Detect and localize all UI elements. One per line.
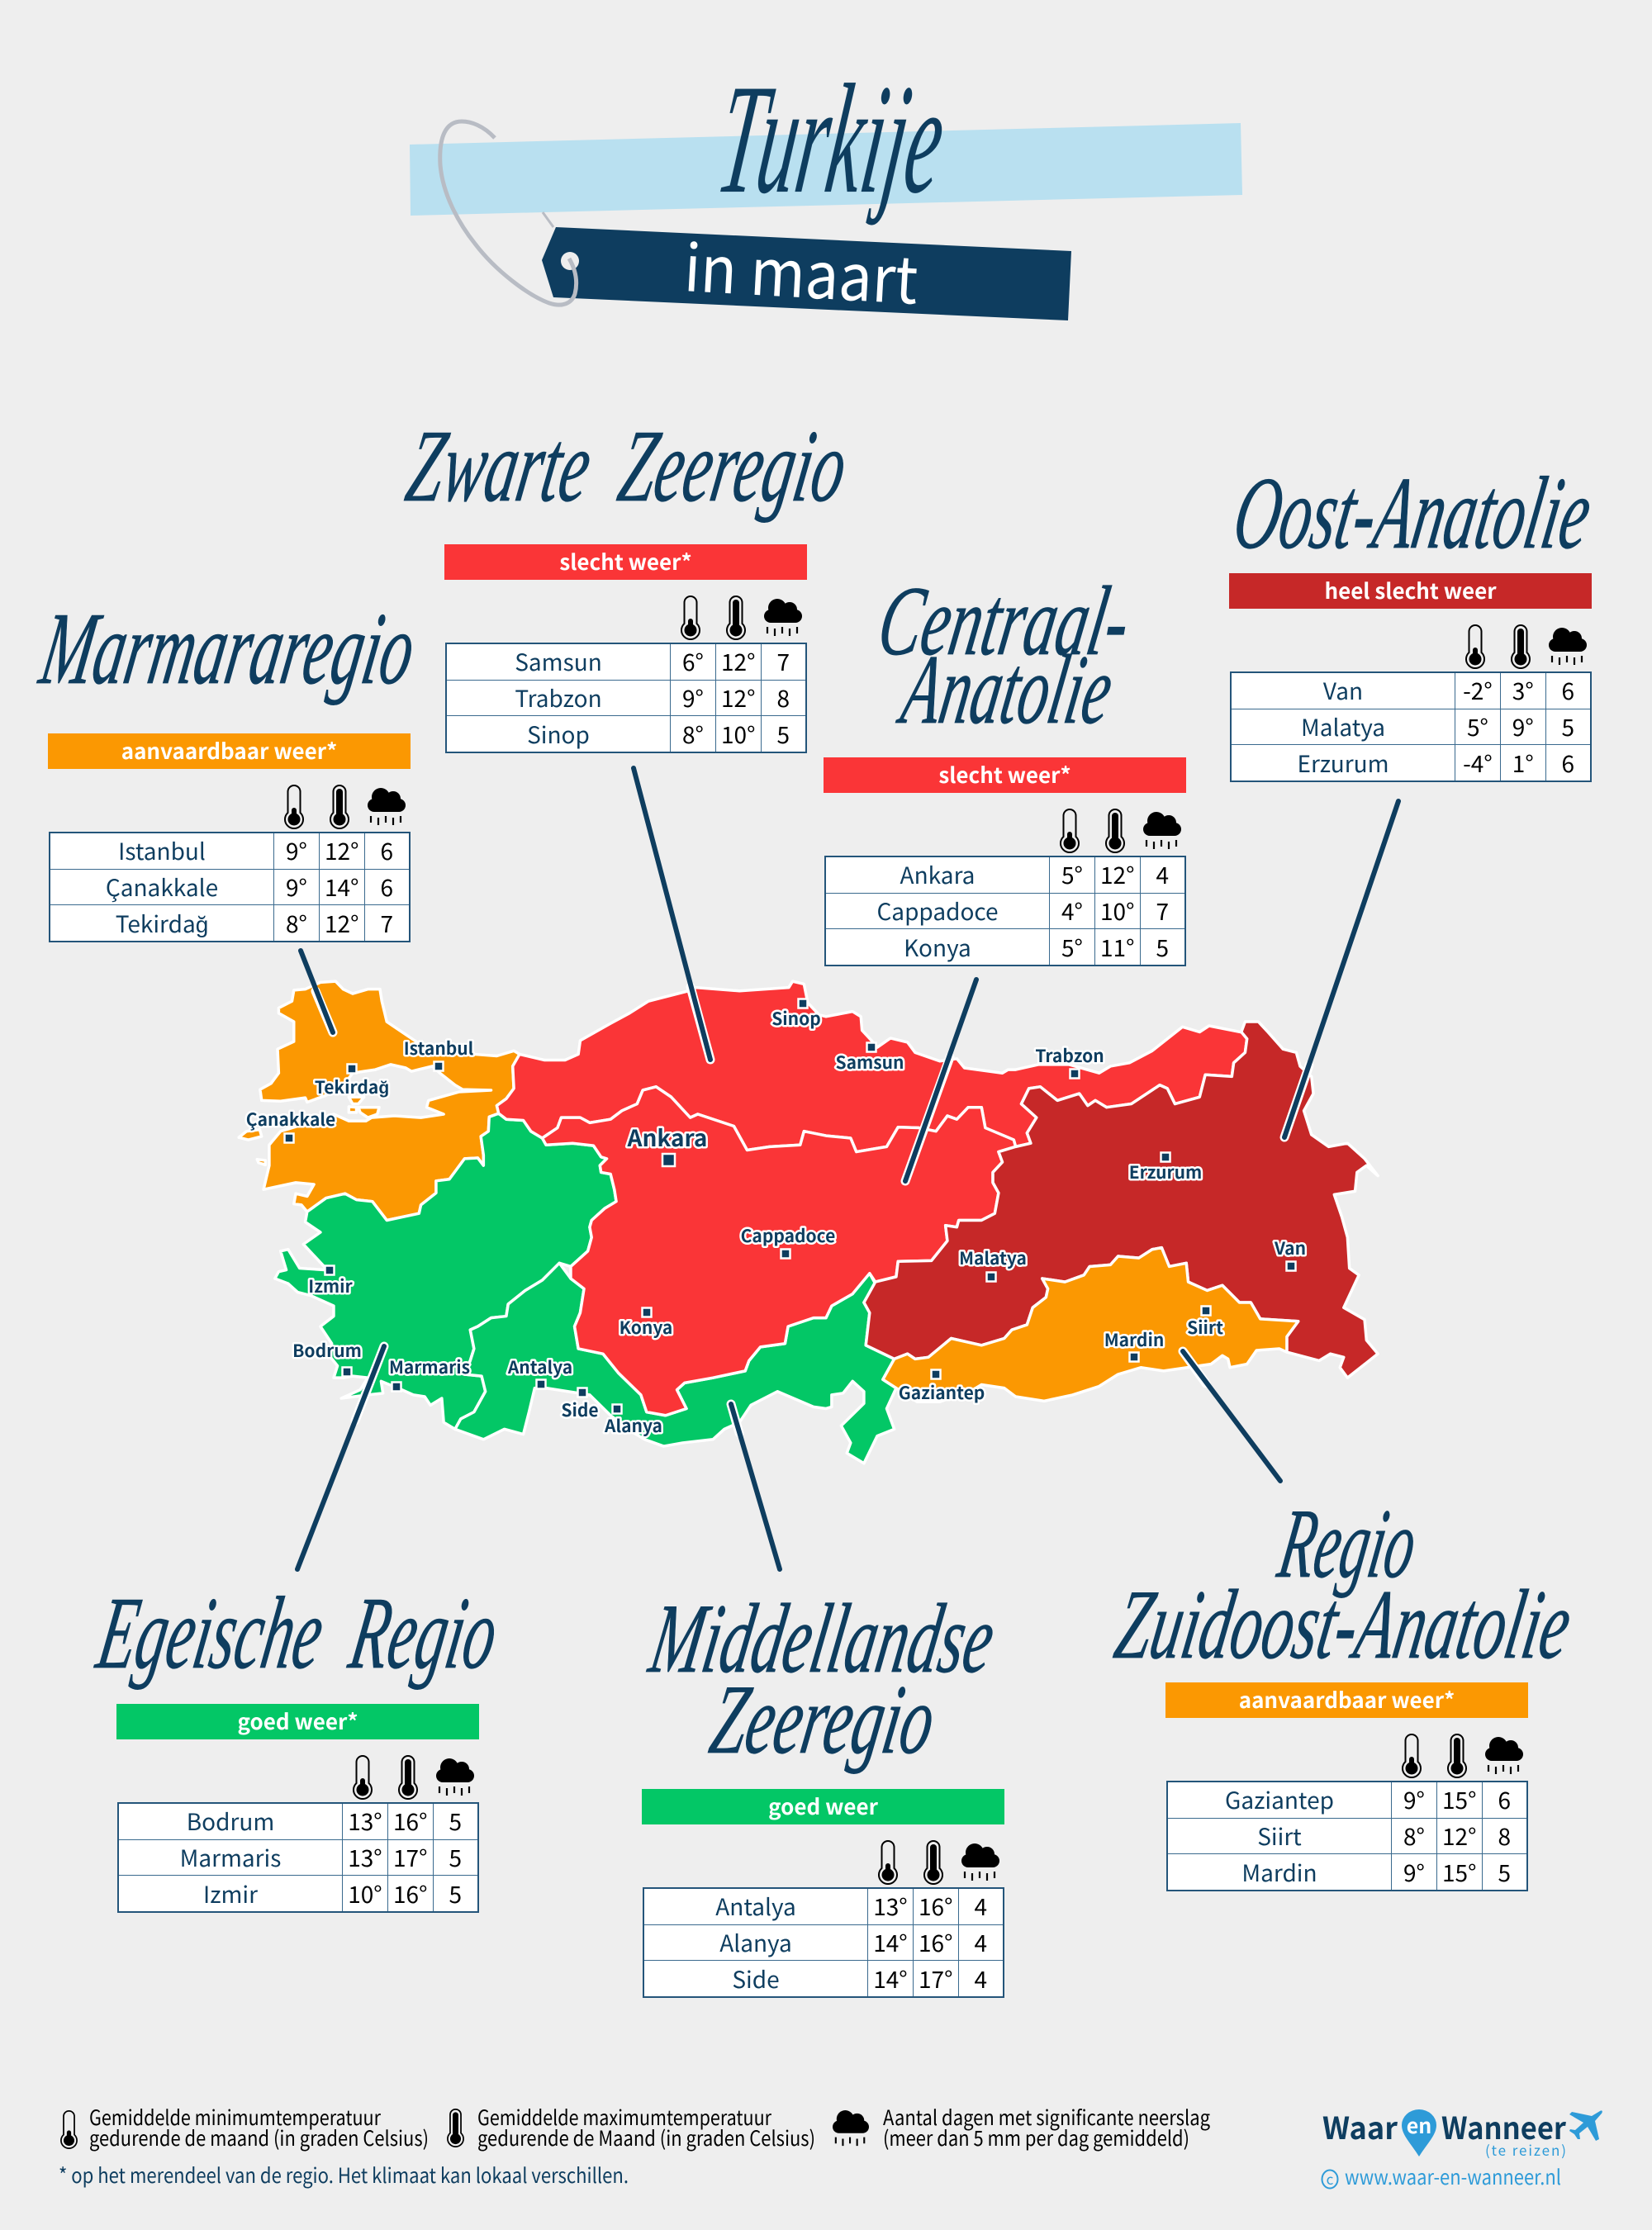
climate table: 15° [1442,1856,1476,1889]
leader line: Middellandse Zeeregio [731,1404,780,1569]
climate table: 7 [777,645,790,678]
panel: Regio Zuidoost-Anatolie [1165,1682,1528,1891]
heading: Middellandse Zeeregio: Middellandse [642,1584,1003,1694]
icon: max temp [1447,1734,1467,1778]
climate table: 14° [873,1926,908,1959]
climate table: Gaziantep [1225,1783,1334,1816]
climate table: 7 [381,907,393,940]
climate table: 6 [1562,674,1574,707]
climate table: 5° [1467,710,1488,743]
city labels: Samsun [836,1050,904,1075]
climate table: 10° [1100,894,1134,928]
icon: max temp [726,595,746,640]
heading: Marmararegio: Marmararegio [32,592,423,706]
climate table: 8 [1498,1820,1511,1853]
light blue band [410,123,1242,216]
climate table: 8° [1403,1820,1425,1853]
climate table: 12° [1442,1820,1476,1853]
climate table: 6° [682,645,704,678]
icon: rain [368,788,406,825]
climate table: 5 [449,1877,462,1910]
icon: maximum temperature [448,2109,463,2147]
map of Turkey [239,768,1398,1569]
city labels: Mardin [1104,1327,1164,1352]
tag string loop [440,121,577,305]
climate table: 9° [682,681,704,714]
rating banner [642,1789,1004,1824]
climate table: 17° [919,1962,952,1995]
climate table: 13° [348,1805,382,1838]
city labels: Istanbul [404,1036,474,1060]
climate table: 13° [348,1841,382,1874]
climate table: Konya [904,931,971,964]
rating banner: slecht weer* [559,546,692,576]
climate table: 5 [449,1841,462,1874]
climate table: 4 [975,1962,987,1995]
climate table: Bodrum [187,1805,274,1838]
icon: minimum temperature [61,2111,77,2148]
heading: Centraal-Anatolie [871,567,1138,745]
icon: rain [1143,812,1181,849]
city labels: Izmir [308,1274,354,1298]
climate table: 5° [1061,931,1083,964]
climate table: Siirt [1257,1820,1302,1853]
city labels: Ankara [627,1121,707,1154]
climate table: Sinop [527,718,590,751]
legend text: rain days: (meer dan 5 mm per dag gemiddeld) [883,2123,1189,2152]
icon: rain [764,599,802,636]
icon: min temp [353,1755,373,1800]
climate table: Ankara [900,858,975,891]
city labels [246,1006,1306,1438]
climate table: 9° [286,834,307,867]
region: Zwarte Zeeregio [496,981,1249,1152]
city labels: Alanya [604,1413,662,1438]
rating banner [116,1704,479,1739]
climate table: 16° [393,1877,427,1910]
climate table: 14° [873,1962,908,1995]
legend [61,2102,1210,2152]
climate table: 12° [325,907,358,940]
legend text: rain days: Aantal dagen met significante neerslag [883,2102,1210,2132]
logo: Waar en Wanneer: www.waar-en-wanneer.nl [1345,2161,1561,2191]
icon: rain [1485,1737,1523,1774]
footnote: * op het merendeel van de regio. Het klimaat kan lokaal verschillen. [59,2160,629,2190]
icon: max temp [330,785,349,829]
icon: max temp [398,1755,418,1800]
climate table: 12° [325,834,358,867]
climate table: 15° [1442,1783,1476,1816]
icon: rain [1549,628,1587,665]
icon: max temp [1105,809,1125,853]
city labels: Çanakkale [246,1107,335,1132]
logo: Waar en Wanneer: Wanneer [1441,2104,1567,2148]
climate table: 5 [1156,931,1169,964]
climate table: 4 [975,1926,987,1959]
climate table [117,1802,479,1913]
city labels: Antalya [507,1355,572,1379]
title: Turkije: Turkije [709,53,955,226]
region: Egeische Regio [275,1113,616,1429]
city labels: Sinop [771,1006,821,1031]
climate table: Marmaris [180,1841,281,1874]
climate table: 6 [1498,1783,1511,1816]
legend text: minimum temperature: gedurende de maand (in graden Celsius) [89,2123,429,2152]
leader line: Marmararegio [301,951,333,1032]
city labels: Tekirdağ [315,1075,389,1099]
climate table: 4° [1061,894,1083,928]
climate table: 9° [286,871,307,904]
tag hole [561,252,579,270]
climate table: 5 [1498,1856,1511,1889]
legend text: minimum temperature: Gemiddelde minimumtemperatuur [89,2102,381,2132]
panel: Oost-Anatolie [1229,573,1592,782]
icon: min temp [1465,624,1485,669]
legend text: rain days [883,2102,1210,2152]
climate table: Side [732,1962,780,1995]
climate table: Samsun [515,645,602,678]
legend text: minimum temperature [89,2102,429,2152]
climate table: 5 [449,1805,462,1838]
climate table: 12° [1100,858,1134,891]
climate table [49,832,411,942]
heading: Zwarte Zeeregio: Zwarte Zeeregio [399,410,855,524]
city labels: Konya [620,1315,672,1340]
region: Middellandse Zeeregio [455,1263,896,1464]
leader line: Zwarte Zeeregio [634,768,710,1060]
panel: Egeische Regio [116,1704,479,1913]
climate table: 14° [325,871,358,904]
rating banner: goed weer* [237,1706,358,1736]
climate table: Mardin [1241,1856,1317,1889]
panel: Middellandse Zeeregio [642,1789,1004,1998]
climate table: 9° [1403,1856,1425,1889]
climate table: 13° [873,1890,908,1923]
rating banner: aanvaardbaar weer* [121,735,337,766]
climate table: Alanya [719,1926,792,1959]
icon: min temp [1402,1734,1422,1778]
rating banner: slecht weer* [938,759,1071,790]
city labels: Side [561,1397,599,1422]
dark tag [542,227,1071,320]
climate table: Van [1323,674,1363,707]
climate table: 16° [919,1926,952,1959]
logo: Waar en Wanneer [1322,2104,1602,2191]
legend text: maximum temperature: Gemiddelde maximumtemperatuur [477,2102,771,2132]
climate table: Malatya [1301,710,1385,743]
icon: min temp [681,595,700,640]
region: Zuidoost-Anatolie [883,1248,1298,1402]
leader line: Zuidoost-Anatolie [1183,1351,1280,1481]
climate table: Istanbul [118,834,206,867]
climate table: 4 [975,1890,987,1923]
legend text: maximum temperature: gedurende de Maand (in graden Celsius) [477,2123,815,2152]
rating banner [48,733,411,769]
leader line: Egeische Regio [297,1346,384,1569]
heading: Middellandse Zeeregio [642,1584,1003,1775]
climate table: -2° [1463,674,1493,707]
climate table: 10° [348,1877,382,1910]
climate table: Cappadoce [876,894,999,928]
climate table: 4 [1156,858,1169,891]
city labels: Bodrum [292,1338,362,1363]
city labels: Cappadoce [741,1223,835,1248]
rating banner [1165,1682,1528,1718]
legend text: maximum temperature [477,2102,815,2152]
leader line: Centraal-Anatolie [905,980,976,1181]
icon: copyright [1322,2168,1338,2189]
climate table: 12° [721,645,755,678]
icon: min temp [284,785,304,829]
climate table: Trabzon [515,681,602,714]
climate table: Antalya [715,1890,796,1923]
region: Oost-Anatolie [864,1022,1378,1378]
rating banner: heel slecht weer [1324,575,1497,605]
city labels: Erzurum [1129,1160,1202,1184]
climate table [643,1887,1004,1998]
climate table: -4° [1463,747,1493,780]
climate table: 11° [1100,931,1134,964]
icon: rain [833,2110,869,2146]
title banner [410,53,1242,323]
region: Marmara [239,981,520,1220]
climate table: 6 [381,834,393,867]
heading: Regio Zuidoost-Anatolie: Regio [1271,1489,1425,1599]
climate table: Tekirdağ [116,907,208,940]
climate table: 9° [1512,710,1534,743]
logo: Waar en Wanneer: Waar [1322,2104,1398,2148]
region: Centraal-Anatolie [543,1087,1016,1416]
climate table: 3° [1512,674,1534,707]
climate table: 5° [1061,858,1083,891]
climate table: 8° [286,907,307,940]
tag string behind [543,212,553,227]
icon: rain [961,1843,999,1881]
climate table: 8° [682,718,704,751]
icon: max temp [923,1840,943,1885]
panel: Zwarte Zeeregio [444,544,807,753]
climate table [1230,671,1592,782]
rating banner [444,544,807,580]
city labels: Malatya [959,1245,1027,1270]
rating banner [824,757,1186,793]
climate table [824,856,1186,966]
city labels: Siirt [1187,1315,1223,1340]
climate table: 6 [1562,747,1574,780]
icon: min temp [1060,809,1080,853]
heading: Centraal-Anatolie: Centraal- [871,567,1138,676]
climate table: 6 [381,871,393,904]
leader line: Oost-Anatolie [1284,801,1398,1137]
heading: Middellandse Zeeregio: Zeeregio [703,1665,943,1775]
rating banner: aanvaardbaar weer* [1239,1684,1455,1715]
subtitle: in maart: in maart [682,217,921,323]
city labels: Marmaris [389,1355,470,1379]
icon: rain [436,1758,474,1796]
rating banner: goed weer [768,1791,878,1821]
climate table: Izmir [203,1877,258,1910]
city labels: Gaziantep [899,1380,985,1405]
climate table: 16° [919,1890,952,1923]
climate table: 5 [777,718,790,751]
logo: Waar en Wanneer: (te reizen) [1485,2139,1566,2160]
climate table: Çanakkale [106,871,218,904]
city markers [284,999,1295,1414]
climate table: 17° [393,1841,427,1874]
heading: Egeische Regio: Egeische Regio [89,1577,506,1691]
climate table: 10° [721,718,755,751]
city labels: Trabzon [1035,1043,1104,1068]
climate table: 1° [1512,747,1534,780]
icon: airplane [1569,2110,1602,2141]
icon: map pin [1402,2109,1436,2156]
climate table: 16° [393,1805,427,1838]
climate table: 5 [1562,710,1574,743]
heading: Regio Zuidoost-Anatolie [1108,1489,1579,1680]
panel: Centraal-Anatolie [824,757,1186,966]
icon: copyright: c [1327,2168,1334,2189]
heading: Centraal-Anatolie: Anatolie [891,635,1121,745]
climate table: 7 [1156,894,1169,928]
climate table: Erzurum [1297,747,1389,780]
panel: Marmararegio [48,733,411,942]
rating banner [1229,573,1592,609]
climate table: 12° [721,681,755,714]
logo: Waar en Wanneer: en [1407,2110,1431,2140]
icon: min temp [878,1840,898,1885]
climate table [1166,1781,1528,1891]
climate table: 9° [1403,1783,1425,1816]
climate table [445,643,807,753]
city labels: Van [1274,1236,1306,1260]
climate table: 8 [777,681,790,714]
icon: max temp [1511,624,1531,669]
